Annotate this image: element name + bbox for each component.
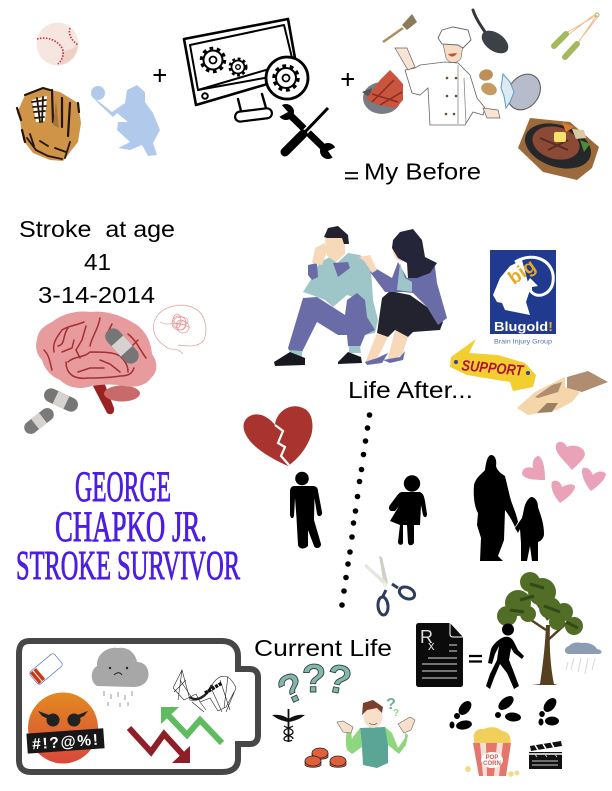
icon: caduceus (272, 709, 305, 742)
frying pan (473, 10, 512, 58)
icon: medication pills (305, 748, 346, 767)
icon: footprints (450, 693, 559, 731)
icon: popcorn box: POP (486, 755, 498, 761)
equals sign (469, 656, 482, 662)
dotted divider line (339, 412, 372, 608)
icon: walking person (486, 624, 524, 689)
logo: blugold brain injury group (490, 250, 556, 334)
illustration: confused man shrugging: ? (393, 708, 399, 719)
wok with flames (362, 70, 403, 114)
icon: scissors (364, 556, 417, 615)
icon: bandage (42, 386, 80, 414)
logo caption: Brain Injury Group (494, 338, 552, 346)
icon: support ribbon (450, 339, 536, 391)
icon: angry face with censored swearing (26, 692, 105, 764)
illustration: confused man shrugging: ? (386, 696, 396, 713)
icon: question marks: ? (271, 664, 312, 714)
icon: sad rain cloud (92, 648, 149, 707)
icon: angry face with censored swearing: #!?@%! (32, 732, 99, 753)
icon: pink hearts (522, 442, 606, 503)
icon: prescription document: x (428, 638, 435, 653)
text block: stroke date (19, 216, 175, 308)
icon: baseball (36, 22, 78, 66)
icon: red arrow down (129, 728, 190, 763)
logo: blugold brain injury group: Blugold ! (494, 320, 553, 334)
illustration: chef juggling cookware (362, 10, 547, 125)
pot with water (501, 68, 547, 116)
title: george chapko jr stroke survivor: STROKE SURVIVOR (16, 542, 240, 588)
icon: father and child silhouette (474, 455, 544, 561)
icon: support ribbon: SUPPORT (461, 357, 526, 380)
chef figure (395, 27, 500, 125)
icon: question marks (271, 656, 355, 714)
icon: small rain cloud (565, 642, 602, 674)
text block: stroke date: 41 (84, 249, 111, 275)
heading: life after: Life After... (348, 377, 473, 403)
text block: stroke date: Stroke at age (19, 216, 175, 242)
plus sign (342, 73, 354, 86)
icon: helping hands (517, 371, 608, 415)
icon: popcorn box: CORN (483, 761, 501, 767)
woman (359, 229, 447, 365)
icon: bandage (22, 405, 56, 437)
logo: blugold brain injury group: big (505, 256, 540, 289)
icon: tree (497, 572, 583, 685)
spatula (383, 14, 417, 42)
icon: roller coaster (173, 670, 236, 712)
icon: prescription document (416, 623, 463, 687)
illustration: confused man shrugging (337, 696, 415, 768)
heading: my before: My Before (364, 158, 481, 184)
icon: baseball glove (17, 88, 81, 161)
icon: prescription document: R (420, 627, 433, 647)
icon: man figure (290, 472, 322, 549)
illustration: brain with bandage (36, 311, 156, 414)
potatoes (478, 68, 499, 97)
icon: question marks: ? (302, 657, 326, 701)
icon: tangled thought doodle (153, 305, 206, 354)
icon: broken heart (244, 406, 312, 466)
illustration: couple sitting, comforting (274, 226, 447, 366)
title: george chapko jr stroke survivor (16, 464, 240, 588)
equals sign (345, 173, 358, 178)
man (274, 226, 378, 366)
icon: green arrow up (161, 707, 222, 743)
plus sign (154, 69, 166, 82)
text block: stroke date: 3-14-2014 (38, 282, 155, 308)
icon: wrench and screwdriver (275, 102, 341, 161)
icon: woman figure (389, 475, 427, 545)
title: george chapko jr stroke survivor: GEORGE (75, 464, 171, 511)
icon: low battery (29, 653, 63, 685)
icon: computer monitor with gears (184, 19, 308, 122)
icon: sizzling steak plate (518, 116, 599, 180)
icon: catcher silhouette (91, 85, 160, 156)
heading: current life: Current Life (254, 635, 392, 661)
title: george chapko jr stroke survivor: CHAPKO JR. (55, 504, 207, 551)
icon: movie clapperboard (529, 741, 562, 769)
icon: popcorn box (465, 727, 520, 777)
icon: kitchen tongs (554, 13, 599, 57)
icon: question marks: ? (322, 656, 355, 704)
panel: battery outline (19, 641, 258, 772)
